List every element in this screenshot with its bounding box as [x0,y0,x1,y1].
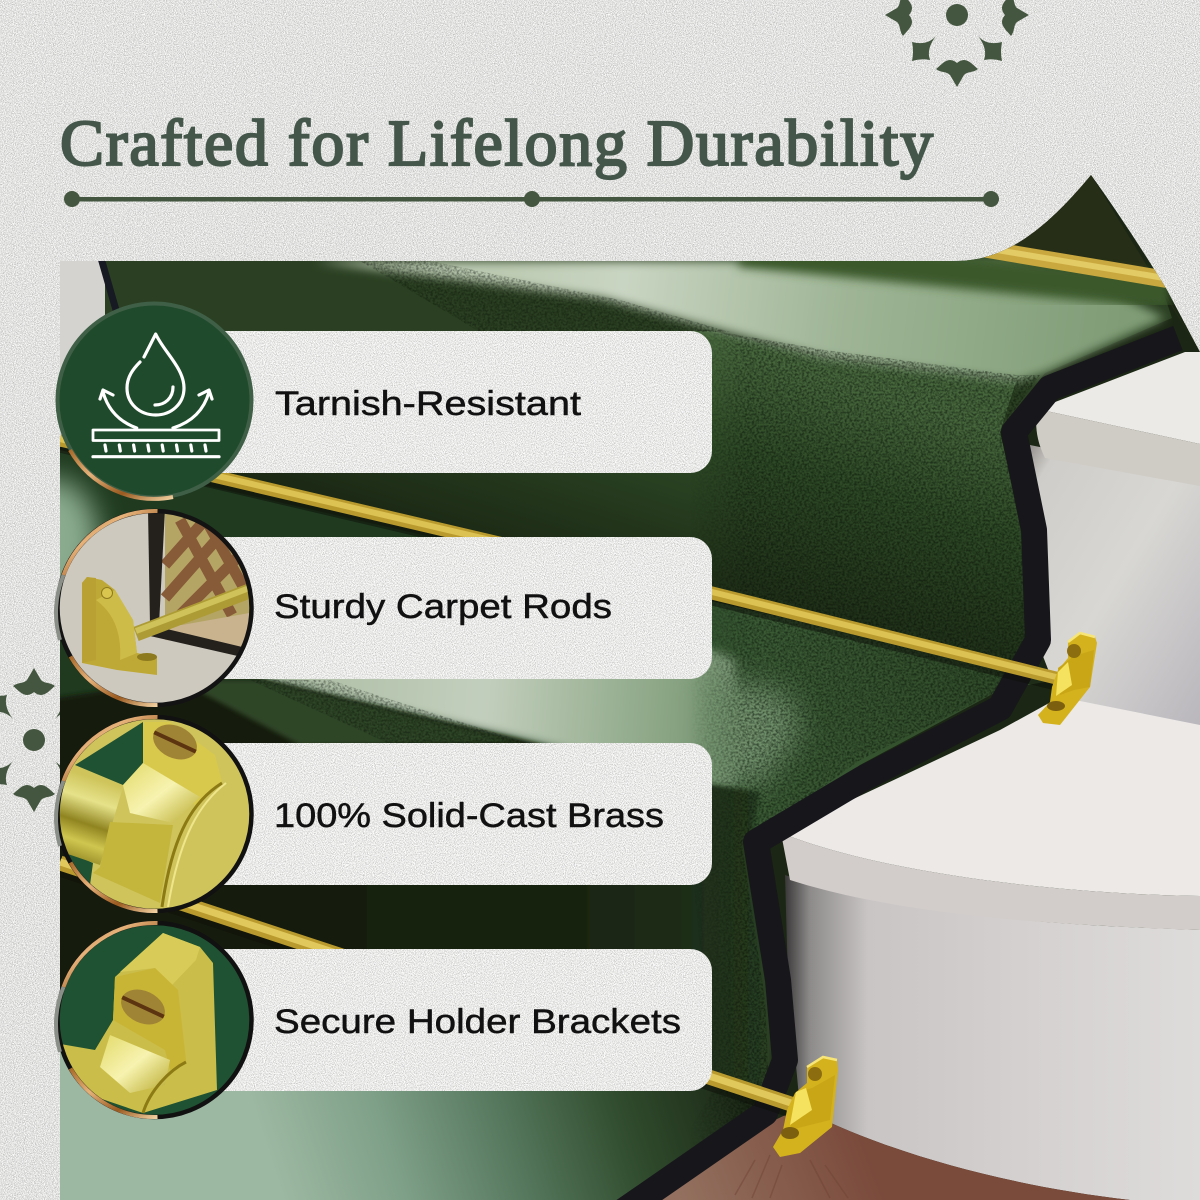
runner binding top left [101,258,116,310]
feature row: Sturdy Carpet Rods [150,537,712,679]
image circle: holder bracket [55,923,255,1123]
label: Secure Holder Brackets [274,1003,681,1041]
card [150,949,712,1091]
floor [662,1114,1130,1200]
card [150,537,712,679]
icon: water drop repelled from surface [58,304,252,499]
runner: second riser [40,680,775,1090]
feature row: Secure Holder Brackets [150,949,712,1091]
bracket [82,577,157,675]
brass bracket lower [773,1057,838,1157]
carpet weave texture right [696,330,1040,1134]
white stair surface lower [781,697,1200,896]
label: Tarnish-Resistant [275,385,581,423]
runner: third tread [60,1052,726,1200]
runner: first tread dark base [60,261,1172,454]
card [150,743,712,885]
white stair lip upper [1036,409,1200,486]
black runner binding [622,338,1178,1200]
card [150,331,712,473]
second tread left glow [60,461,114,578]
dark upper fold above rod [990,175,1186,330]
white stair lip lower [781,833,1200,930]
white stair riser upper [1025,445,1200,730]
second tread lit area [262,640,735,785]
first tread top shade [740,250,1170,292]
ornament: top right floral ring [885,0,1029,87]
brass rod upper [60,439,1056,683]
title: Crafted for Lifelong Durability [60,107,933,180]
runner: first riser [60,331,1040,690]
carpet weave texture on ridges [252,261,730,743]
carpet pattern [165,509,255,648]
white stair tread top right [1037,352,1200,444]
white stair riser lower [785,875,1200,1200]
first tread lit area [315,261,1165,382]
title divider [64,191,999,207]
feature row: Tarnish-Resistant [150,331,712,473]
wall corner top left [60,261,105,447]
image circle: solid brass casting [55,717,255,917]
second riser olive ridge [203,679,516,743]
runner: second tread base [60,452,1056,845]
brass bracket upper [1038,633,1097,725]
ornament: left floral ring [0,668,79,812]
image circle: carpet rod [55,509,255,709]
label: 100% Solid-Cast Brass [274,797,664,835]
second tread lit fade to the right [700,670,800,785]
feature row: 100% Solid-Cast Brass [150,743,712,885]
floor wood lines [735,1155,848,1198]
brass rod lower [60,862,800,1112]
carpet binding [148,509,165,625]
brass rod top right [985,249,1170,280]
rod [136,590,252,634]
label: Sturdy Carpet Rods [274,588,612,626]
